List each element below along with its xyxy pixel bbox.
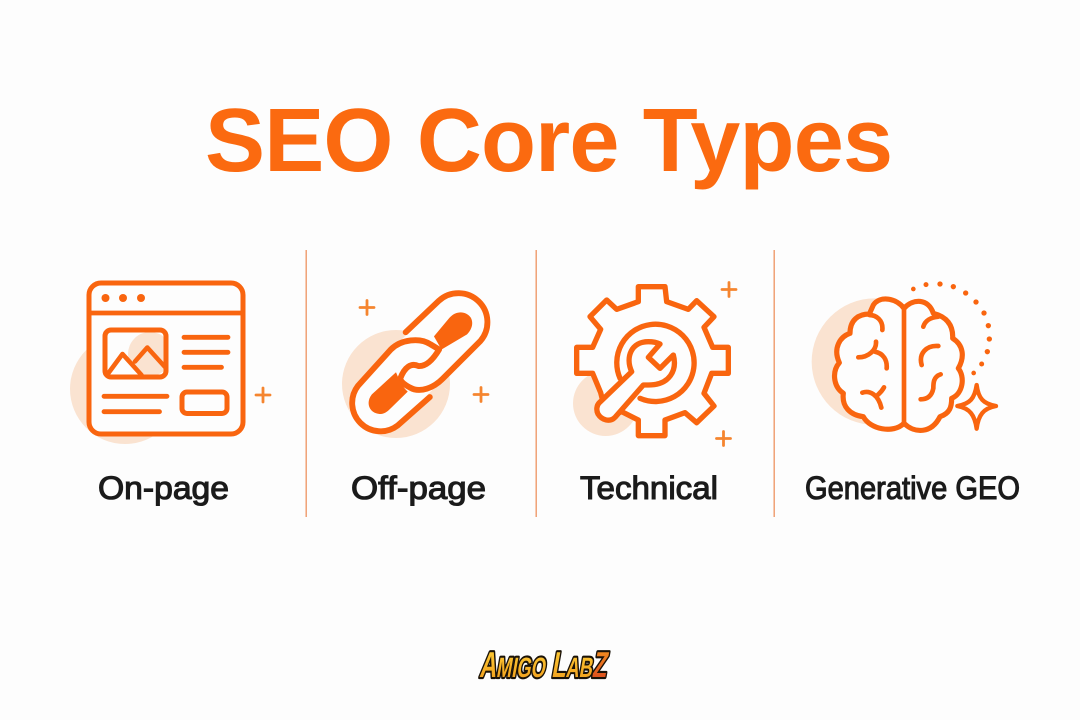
label: Technical: Technical [580, 470, 718, 506]
icon: plus [474, 388, 488, 402]
icon: plus [256, 388, 270, 402]
icon: browser window [70, 283, 243, 444]
icon: gear and wrench [573, 287, 728, 436]
label: Generative GEO: Generative GEO [805, 470, 1020, 506]
icon: plus [360, 300, 374, 314]
icon: plus [722, 282, 736, 296]
panel: Generative GEO [805, 281, 1020, 506]
title: SEO Core Types [205, 91, 893, 191]
label: On-page: On-page [98, 470, 229, 506]
panel: On-page [70, 283, 270, 506]
panel: Technical [573, 282, 736, 506]
icon: brain with sparkle [812, 281, 996, 430]
panel: Off-page [342, 293, 488, 506]
label: Off-page: Off-page [351, 470, 486, 506]
logo: Amigo Labz: AMIGO LABZ [478, 644, 612, 685]
icon: chain link [342, 293, 487, 438]
icon: plus [716, 432, 730, 446]
